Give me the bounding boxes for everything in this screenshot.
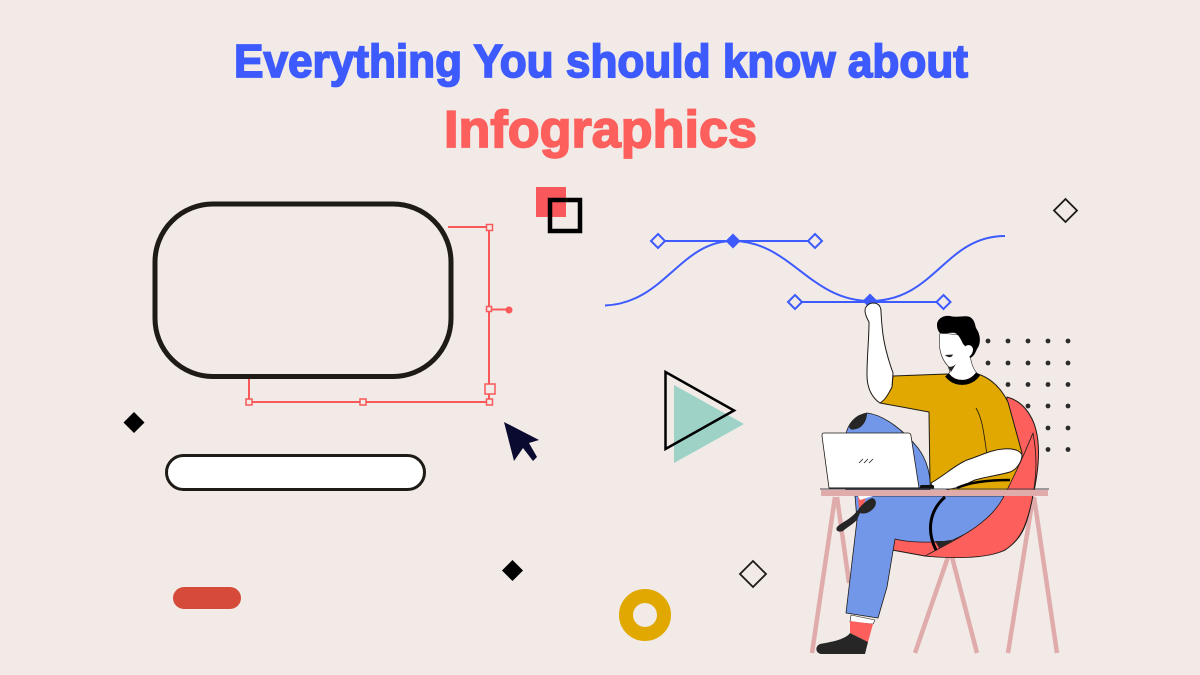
knee patch	[849, 413, 867, 430]
desk top	[820, 489, 1049, 496]
collar	[947, 374, 978, 382]
chair back	[892, 397, 1039, 557]
far foot	[836, 496, 876, 532]
laptop	[822, 433, 934, 490]
title: Everything You should know about	[234, 35, 968, 87]
icon: black diamond bottom	[502, 560, 523, 581]
person at desk illustration	[812, 303, 1057, 654]
forearm	[931, 449, 1022, 489]
shoe	[816, 633, 868, 654]
main leg	[846, 496, 1013, 618]
cuff	[850, 615, 875, 624]
hair	[937, 316, 980, 358]
icon: outline diamond top right	[1054, 199, 1077, 222]
icon: cursor arrow	[504, 422, 539, 461]
shirt fold	[976, 408, 988, 462]
desk and chair legs	[812, 497, 1057, 653]
torso	[880, 374, 1022, 498]
knee	[846, 413, 930, 490]
dot grid	[986, 339, 1070, 452]
smile and chin shadow	[945, 354, 956, 372]
title	[234, 35, 968, 159]
ear	[964, 345, 973, 357]
icon: play triangles	[666, 372, 744, 463]
title: Infographics	[444, 101, 757, 159]
sock	[850, 621, 873, 642]
icon: outline diamond bottom	[740, 561, 766, 587]
bezier curve with handles	[605, 234, 1005, 309]
icon: yellow ring	[626, 596, 664, 634]
white pill	[166, 456, 424, 490]
icon: overlapping squares	[536, 187, 580, 231]
neck and face	[939, 333, 978, 382]
rounded rectangle with selection handles	[155, 204, 512, 405]
belt strap	[930, 497, 945, 550]
icon: black diamond left	[124, 412, 144, 433]
seat front	[925, 433, 1036, 558]
raised arm	[865, 303, 893, 403]
red pill	[173, 587, 241, 609]
waist strap	[957, 480, 1010, 488]
